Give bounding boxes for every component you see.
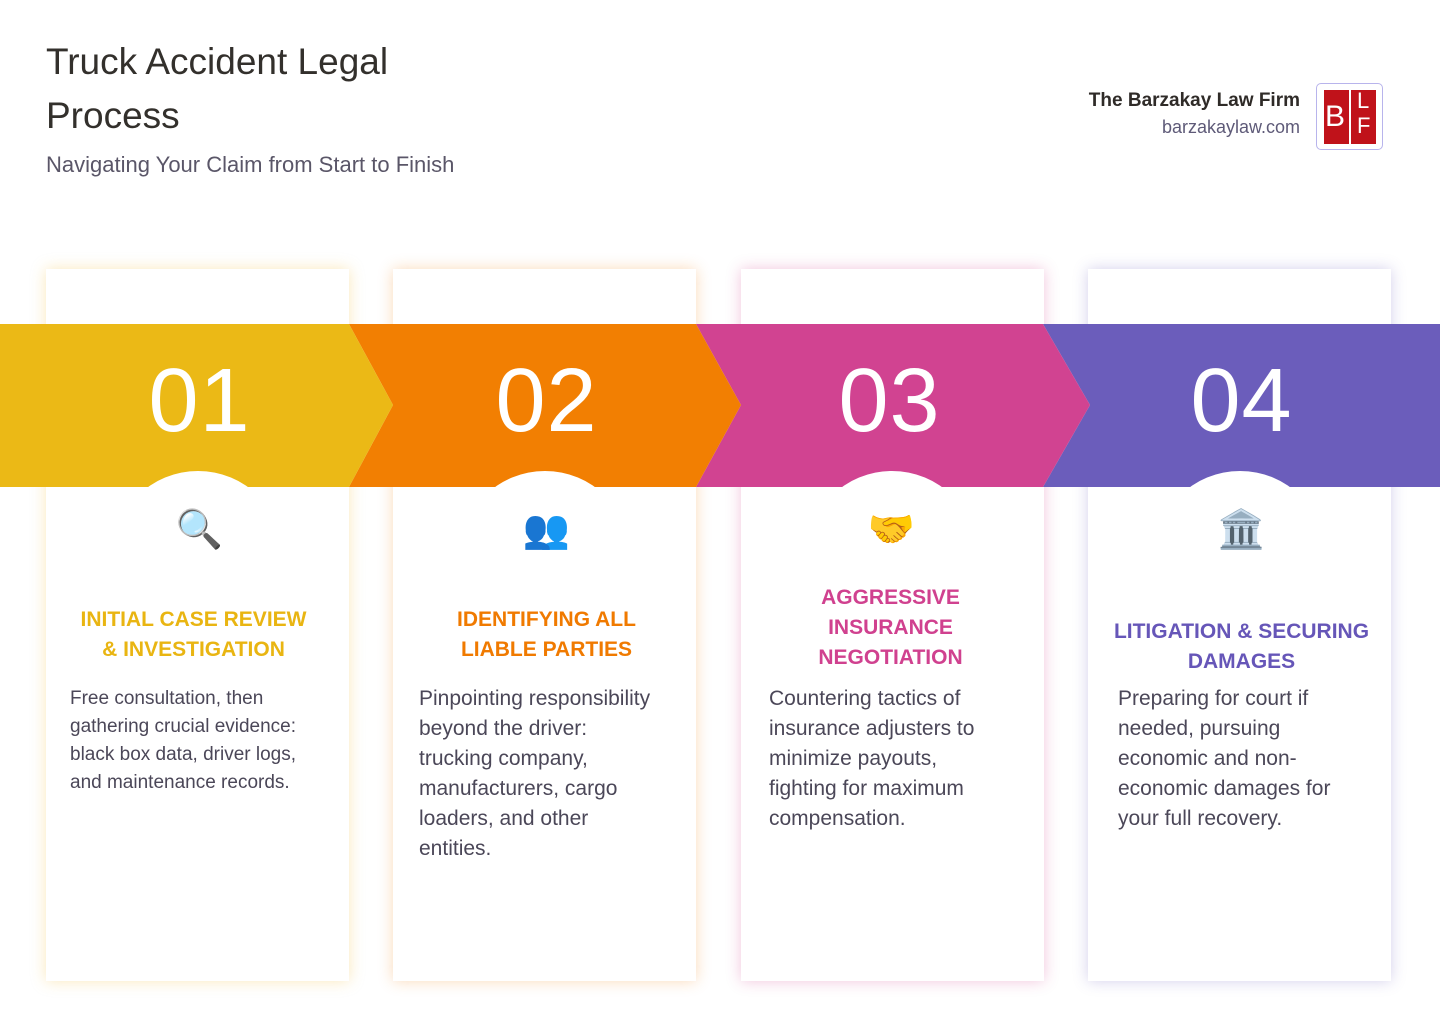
- heading 1: & INVESTIGATION: [102, 638, 285, 661]
- heading 4: [1114, 620, 1369, 673]
- logo: [1316, 83, 1383, 150]
- heading 2: [457, 608, 636, 661]
- brand text: barzakaylaw.com: [1162, 117, 1300, 137]
- subtitle: Navigating Your Claim from Start to Finish: [46, 152, 454, 177]
- text 3: Countering tactics of insurance adjusters to minimize payouts, fighting for maximum compensation.: [769, 687, 974, 830]
- number 02: 02: [495, 351, 598, 451]
- heading 3: INSURANCE: [828, 616, 953, 639]
- logo: B: [1325, 100, 1345, 133]
- heading 4: LITIGATION & SECURING: [1114, 620, 1369, 643]
- logo: L: [1357, 88, 1369, 113]
- text 2: Pinpointing responsibility beyond the driver: trucking company, manufacturers, cargo loaders, and other entities.: [419, 687, 650, 860]
- card 1: [46, 269, 349, 981]
- brand text: [1088, 90, 1300, 137]
- icon: handshake: 🤝: [868, 508, 915, 552]
- heading 1: [81, 608, 306, 661]
- number 03: 03: [838, 351, 941, 451]
- card 3: [741, 269, 1044, 981]
- chevron band: [0, 324, 1440, 487]
- circles: [112, 471, 284, 643]
- card 4: [1088, 269, 1391, 981]
- number 04: 04: [1190, 351, 1293, 451]
- heading 1: INITIAL CASE REVIEW: [81, 608, 306, 631]
- icon: people: 👥: [523, 508, 570, 552]
- text 1: Free consultation, then gathering crucial evidence: black box data, driver logs, and maintenance records.: [70, 688, 296, 793]
- heading 3: AGGRESSIVE: [821, 586, 960, 609]
- text 4: Preparing for court if needed, pursuing economic and non-economic damages for your full recovery.: [1118, 687, 1330, 830]
- card 2: [393, 269, 696, 981]
- heading 4: DAMAGES: [1188, 650, 1295, 673]
- title: Truck Accident Legal Process: [46, 41, 388, 136]
- number 01: 01: [148, 351, 251, 451]
- heading 3: [818, 586, 963, 669]
- logo: F: [1357, 113, 1370, 138]
- heading 3: NEGOTIATION: [818, 646, 963, 669]
- heading 2: LIABLE PARTIES: [461, 638, 632, 661]
- brand text: The Barzakay Law Firm: [1089, 90, 1300, 111]
- icon: magnifier: 🔍: [176, 508, 223, 552]
- icon: courthouse: 🏛: [1218, 508, 1265, 552]
- heading 2: IDENTIFYING ALL: [457, 608, 636, 631]
